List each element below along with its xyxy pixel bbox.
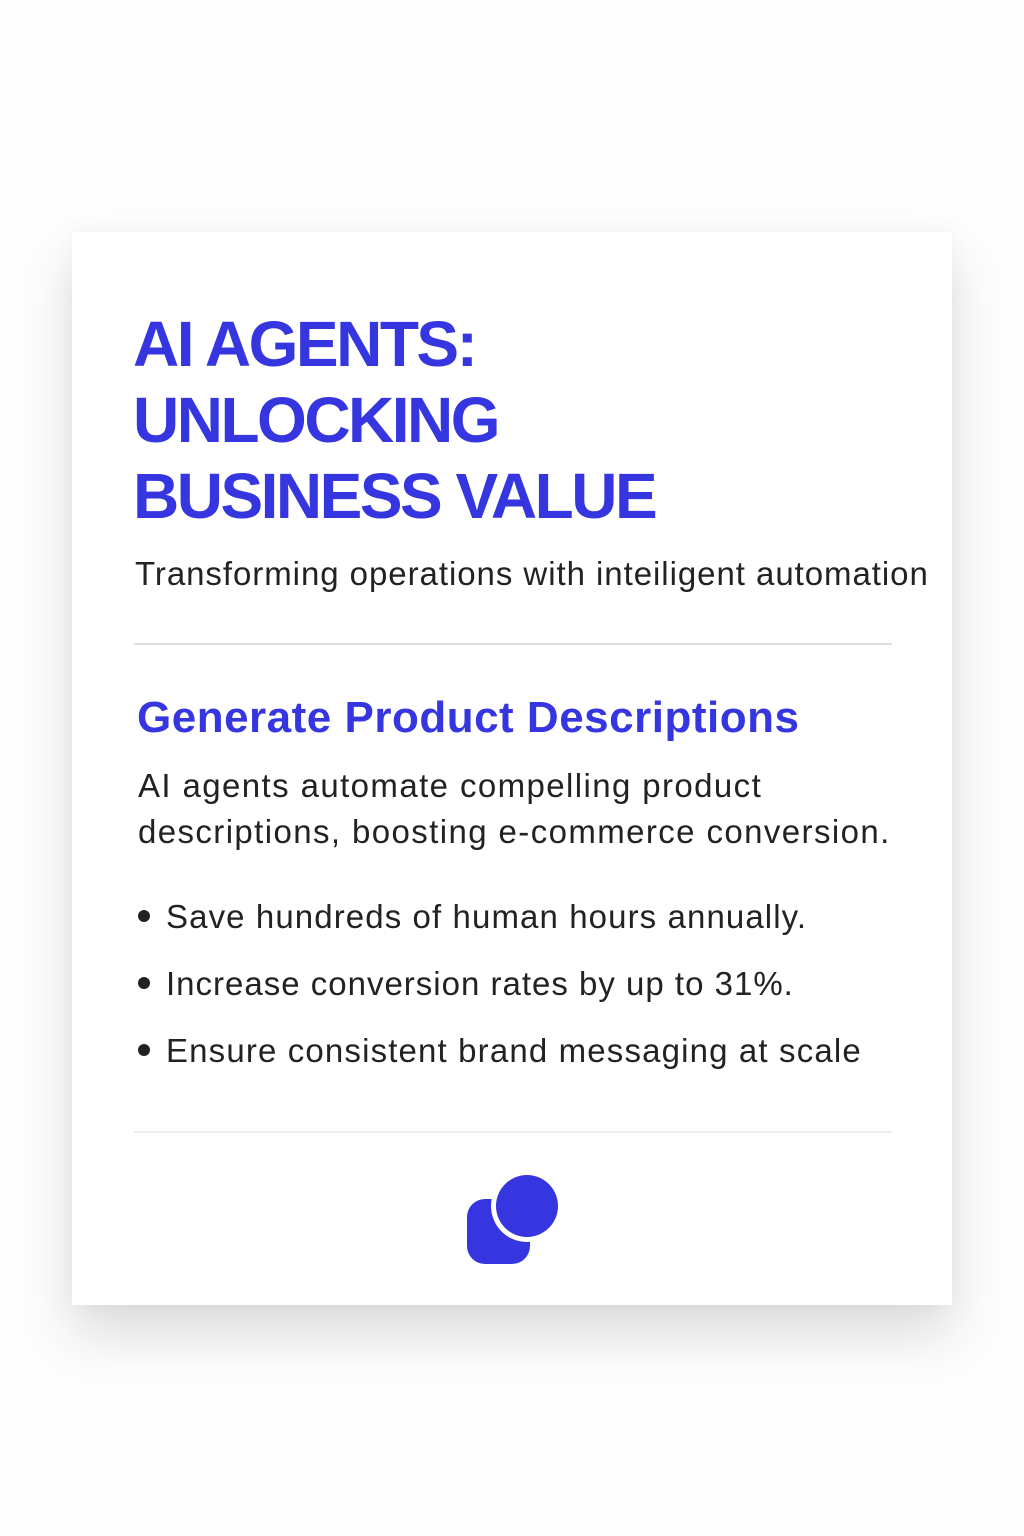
section heading: Generate Product Descriptions — [137, 693, 799, 742]
bullet 1: Save hundreds of human hours annually. — [166, 898, 807, 935]
icon: logo — [467, 1175, 558, 1264]
title — [133, 308, 656, 532]
title: UNLOCKING — [133, 384, 498, 456]
body text: descriptions, boosting e-commerce conversion. — [138, 813, 891, 850]
title: AI AGENTS: — [133, 308, 475, 380]
bullet 2: Increase conversion rates by up to 31%. — [166, 965, 794, 1002]
body text: AI agents automate compelling product — [138, 767, 762, 804]
body text — [138, 767, 891, 850]
bullet 3: Ensure consistent brand messaging at scale — [166, 1032, 862, 1069]
subtitle: Transforming operations with inteiligent automation — [135, 555, 929, 592]
title: BUSINESS VALUE — [133, 460, 655, 532]
card panel — [72, 232, 952, 1305]
